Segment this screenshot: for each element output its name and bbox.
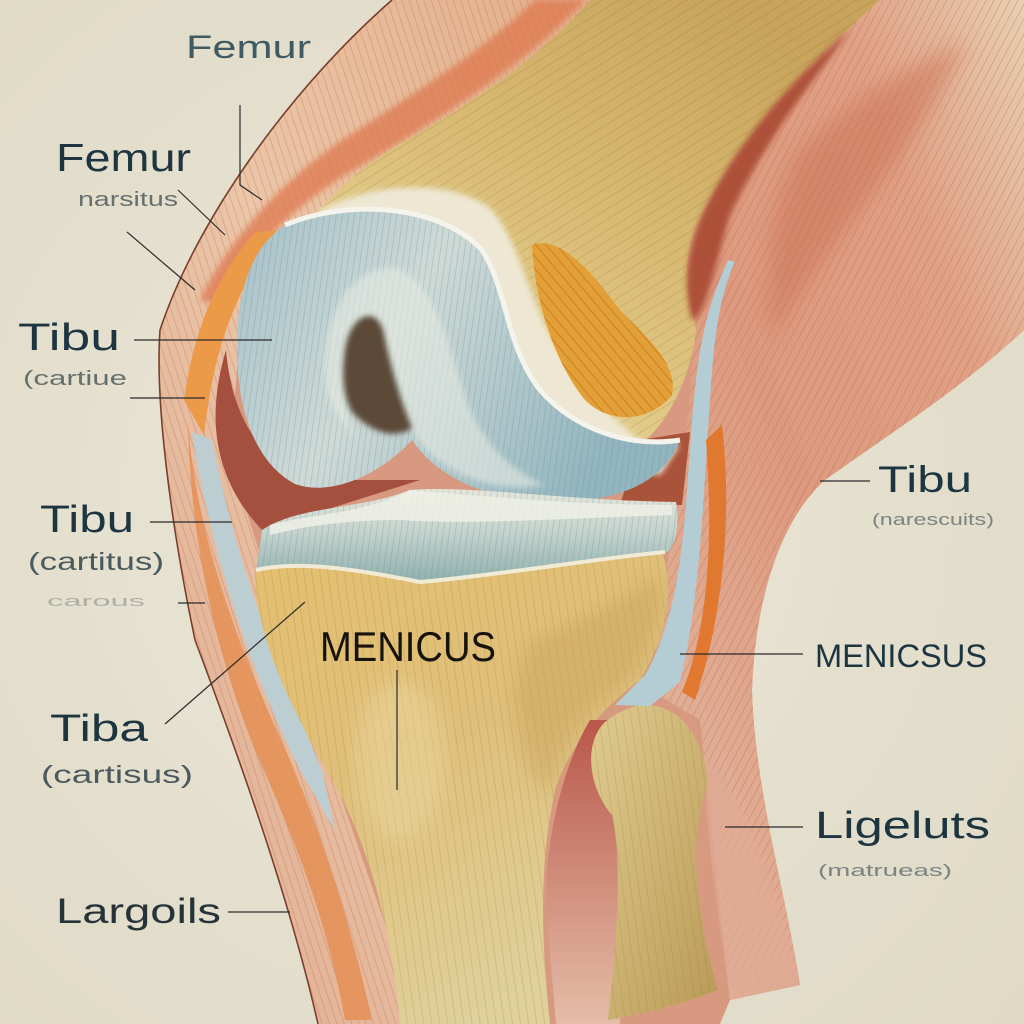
panel: blue side ligament bbox=[192, 432, 335, 830]
panel: tibia bone bbox=[255, 552, 668, 1024]
label: Tiba: Tiba bbox=[50, 708, 149, 750]
panel: femur bone bbox=[318, 0, 880, 445]
panel: femoral condyle cartilage bbox=[237, 209, 680, 502]
panel: posterior ligament strip bbox=[615, 260, 735, 706]
callout lines bbox=[127, 105, 870, 912]
condyle notch bbox=[343, 316, 412, 434]
panel: fibula bone bbox=[591, 705, 718, 1020]
panel: red muscle below tibia bbox=[546, 720, 620, 1024]
label: Femur top: Femur bbox=[186, 29, 311, 65]
label: faded carous: carous bbox=[47, 593, 145, 610]
label: Tibu right: Tibu bbox=[878, 459, 972, 500]
panel: orange femoral patch bbox=[532, 243, 673, 417]
label: cartisus: (cartisus) bbox=[41, 761, 193, 789]
label: Largoils: Largoils bbox=[56, 892, 221, 931]
panel: posterior red tissue bbox=[216, 350, 420, 530]
label: Tibu left: Tibu bbox=[18, 317, 120, 359]
label: cartitus middle left: (cartitus) bbox=[28, 548, 164, 576]
label: Menicsus right: MENICSUS bbox=[815, 638, 987, 674]
label: small caption lower right: (matrueas) bbox=[818, 861, 952, 880]
outer outline bbox=[159, 0, 392, 1024]
panel: dark tissue behind joint bbox=[620, 432, 690, 505]
label: cartiue: (cartiue bbox=[23, 368, 127, 390]
label: narescuits right: (narescuits) bbox=[872, 510, 994, 529]
label: Menicus center: MENICUS bbox=[320, 623, 496, 670]
panel: left muscle and tendon band bbox=[159, 0, 610, 1024]
panel: orange tendon band bbox=[184, 230, 372, 1020]
panel: meniscus bbox=[256, 489, 677, 582]
label: Ligeluts: Ligeluts bbox=[815, 805, 990, 847]
label: Tibu middle left: Tibu bbox=[40, 499, 134, 541]
label: narsitus: narsitus bbox=[78, 189, 178, 211]
lower right muscle bbox=[705, 760, 800, 1000]
panel: femoral cartilage rim bbox=[318, 187, 680, 475]
label: Femur left: Femur bbox=[56, 137, 191, 180]
panel: right muscle group bbox=[650, 0, 1024, 1000]
white central arch bbox=[325, 268, 545, 487]
